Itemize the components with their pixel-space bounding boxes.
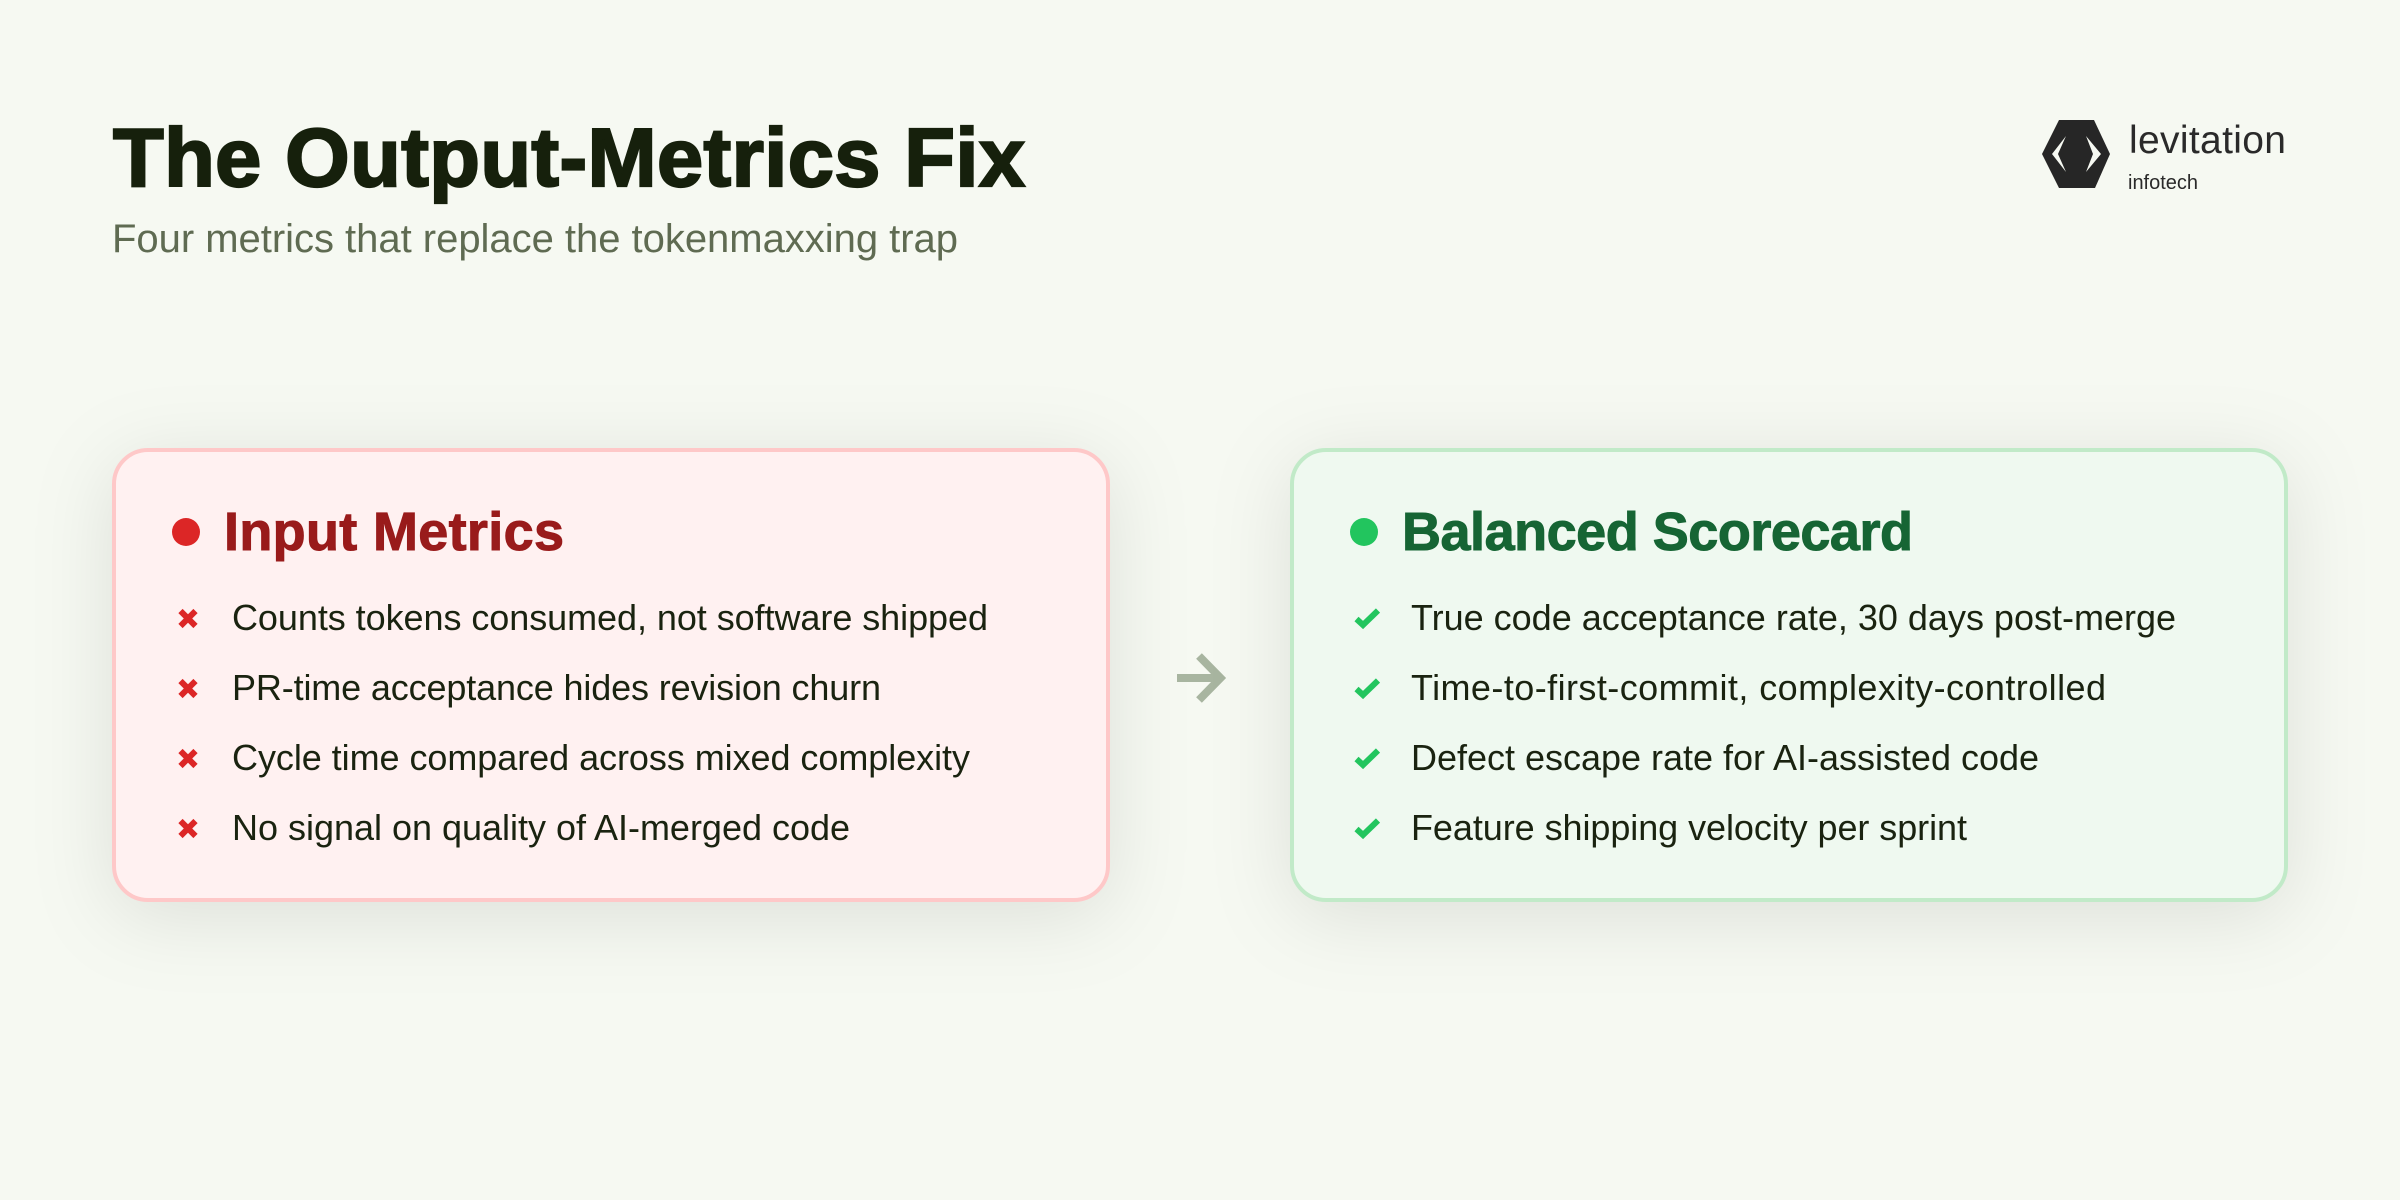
status dot <box>1350 518 1378 546</box>
heading: Input Metrics <box>224 502 564 562</box>
status dot <box>172 518 200 546</box>
list item 2: Time-to-first-commit, complexity-controlled <box>1411 667 2106 708</box>
icon: hexagon logo mark <box>2042 120 2110 188</box>
list item 1: True code acceptance rate, 30 days post-merge <box>1411 597 2176 638</box>
heading: Balanced Scorecard <box>1402 502 1913 562</box>
list item 3: Cycle time compared across mixed complexity <box>232 737 970 778</box>
title: The Output-Metrics Fix <box>113 111 1025 204</box>
list item 4: Feature shipping velocity per sprint <box>1411 807 1967 848</box>
logo wordmark: levitation <box>2129 119 2286 162</box>
card background <box>1292 450 2286 900</box>
panel: input metrics <box>114 450 1108 900</box>
list item 1: Counts tokens consumed, not software shipped <box>232 597 988 638</box>
arrow <box>1177 656 1221 700</box>
logo subtext: infotech <box>2128 172 2198 194</box>
list item 2: PR-time acceptance hides revision churn <box>232 667 881 708</box>
list item 4: No signal on quality of AI-merged code <box>232 807 850 848</box>
subtitle: Four metrics that replace the tokenmaxxing trap <box>112 217 958 261</box>
panel: balanced scorecard <box>1292 450 2286 900</box>
logo: levitation infotech <box>2042 119 2286 194</box>
card background <box>114 450 1108 900</box>
list item 3: Defect escape rate for AI-assisted code <box>1411 737 2039 778</box>
